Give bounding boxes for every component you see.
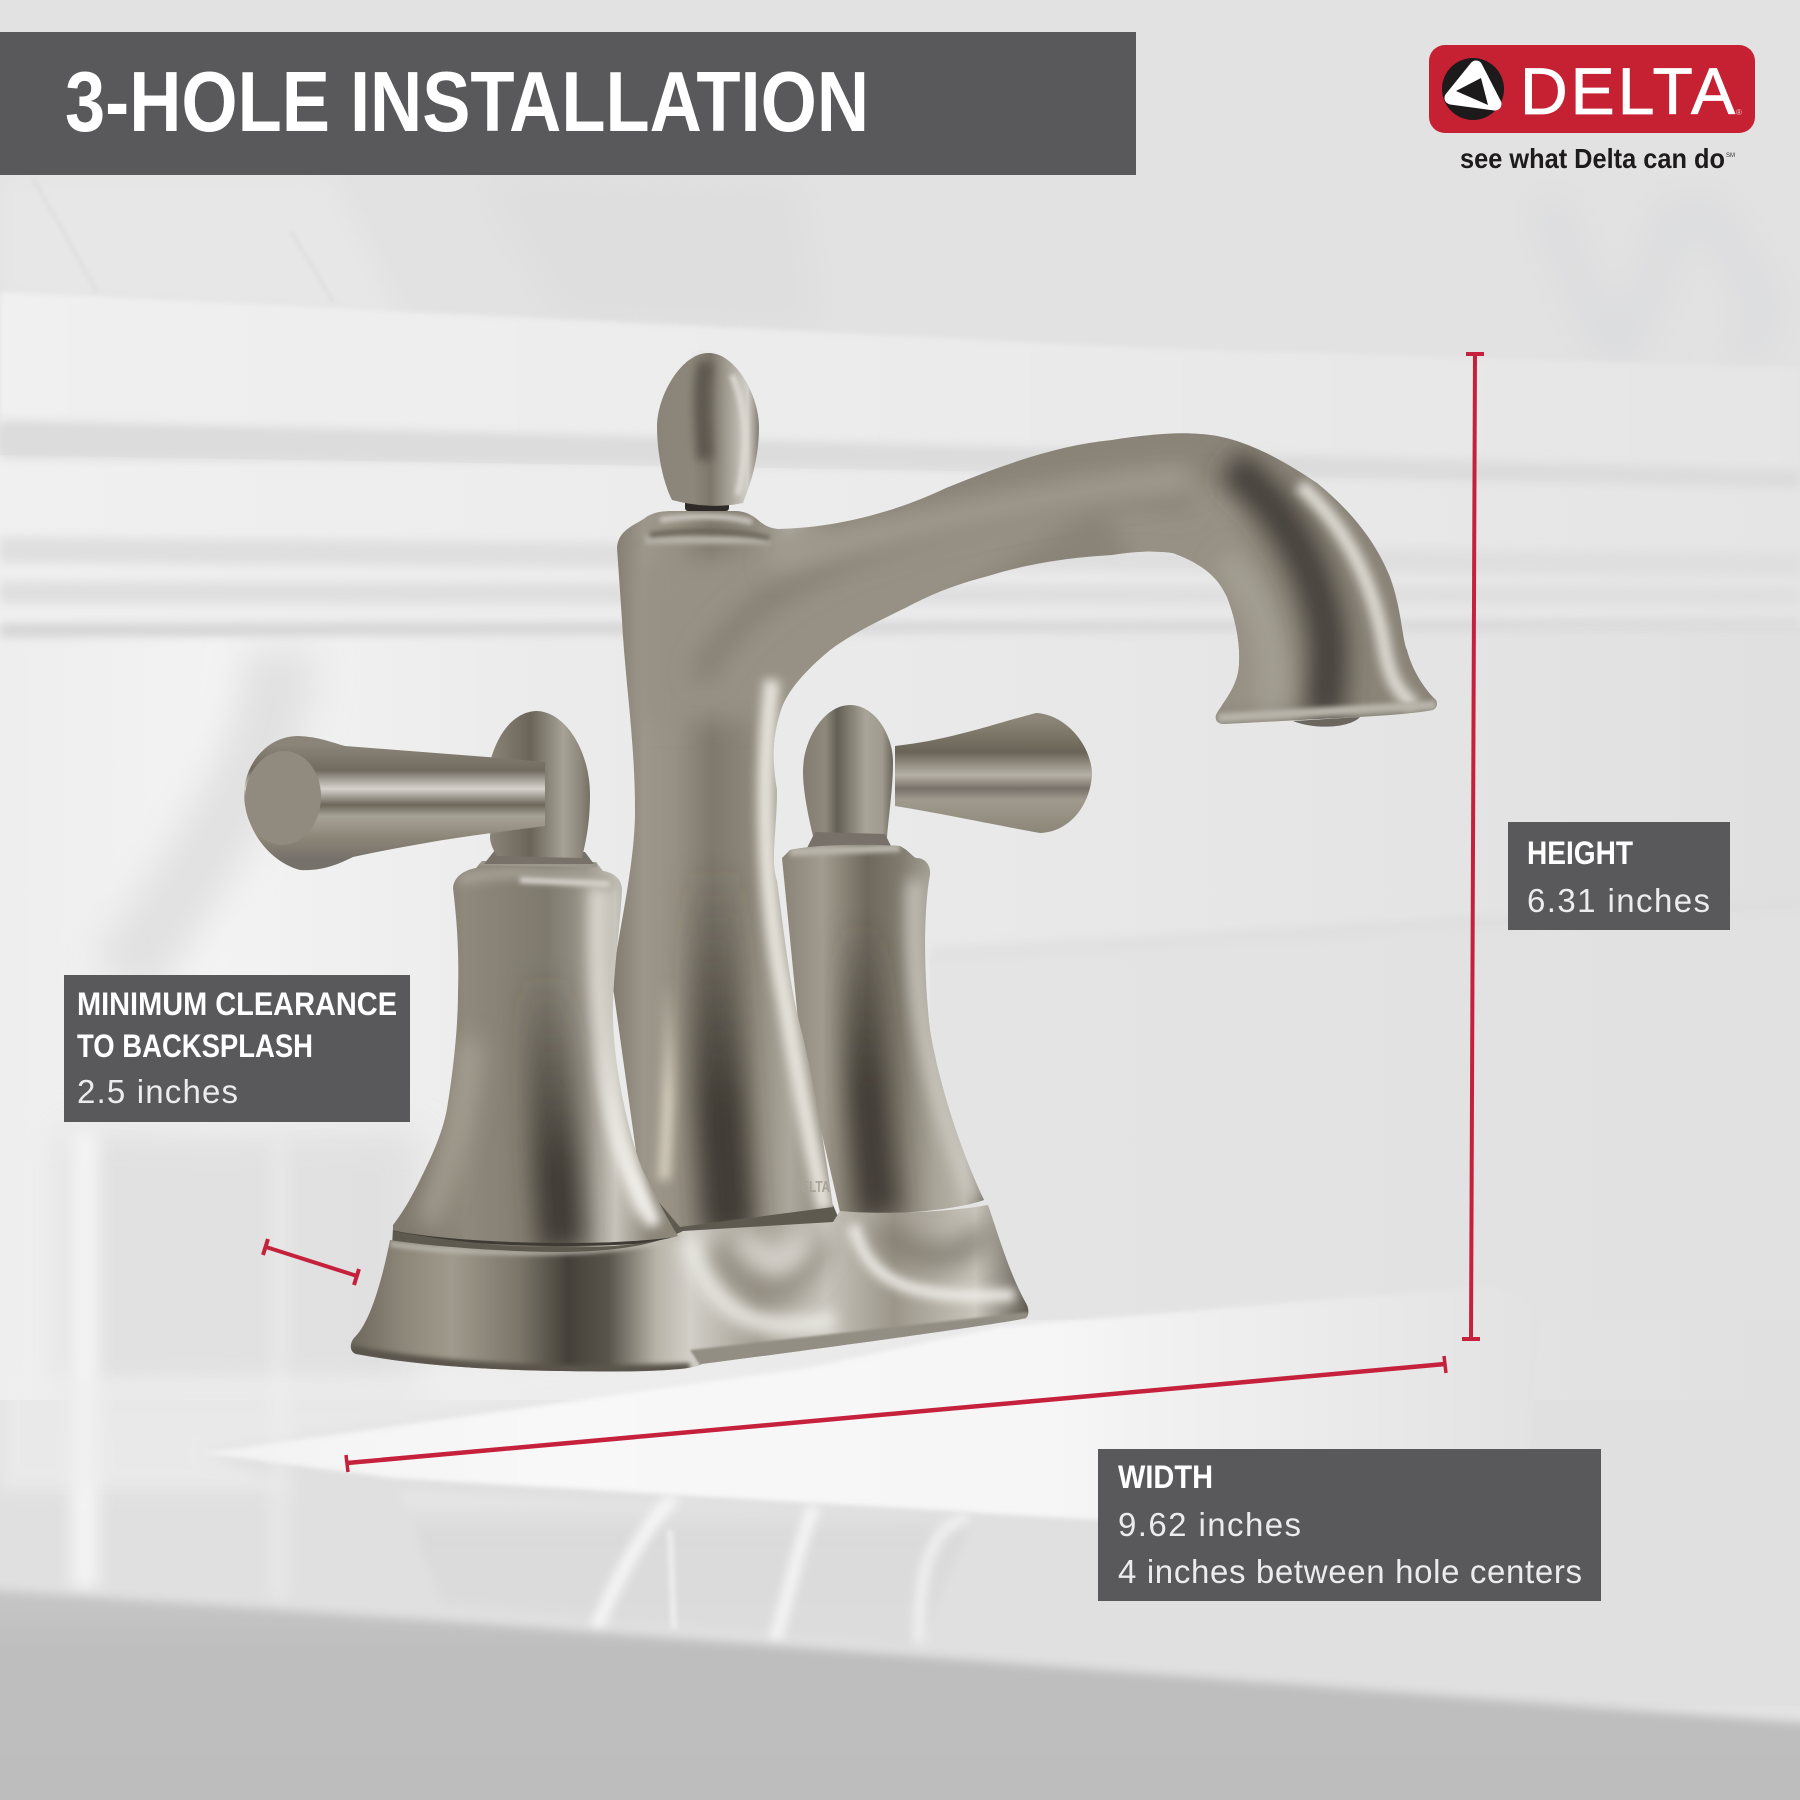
moulding grooves bbox=[0, 420, 1800, 637]
width heading: WIDTH bbox=[1118, 1459, 1213, 1495]
clearance heading: MINIMUM CLEARANCE bbox=[77, 986, 397, 1022]
left lever bbox=[244, 736, 545, 870]
aerator bbox=[1293, 717, 1360, 727]
registered mark: ® bbox=[1736, 108, 1742, 117]
lever end cap bbox=[242, 748, 324, 848]
finial gap bbox=[685, 500, 729, 511]
front floor bbox=[0, 1589, 1800, 1800]
base plate bbox=[350, 1205, 1028, 1372]
central column and spout bbox=[600, 420, 1460, 1250]
wall shadow sweep bbox=[120, 650, 280, 980]
left hub bbox=[490, 711, 590, 858]
tagline: see what Delta can do bbox=[1460, 143, 1725, 174]
right lever bbox=[895, 713, 1092, 833]
base seam backing bbox=[392, 1150, 842, 1260]
title: 3-HOLE INSTALLATION bbox=[65, 55, 869, 150]
width value: 9.62 inches bbox=[1118, 1506, 1301, 1543]
left handle bbox=[242, 711, 690, 1250]
dimension line: clearance bbox=[263, 1239, 359, 1285]
logo badge bbox=[1429, 45, 1755, 133]
counter back surface bbox=[0, 1368, 807, 1490]
right bell bbox=[782, 844, 984, 1213]
callout: minimum clearance bbox=[64, 975, 410, 1122]
service mark: SM bbox=[1726, 153, 1735, 159]
hole spacing: 4 inches between hole centers bbox=[1118, 1553, 1582, 1590]
left bell bbox=[390, 850, 690, 1250]
right collar bbox=[805, 832, 893, 852]
clearance value: 2.5 inches bbox=[77, 1073, 238, 1110]
faucet reflection in basin bbox=[400, 1492, 975, 1646]
height value: 6.31 inches bbox=[1527, 882, 1710, 919]
dimension line: width bbox=[346, 1356, 1446, 1472]
Delta logo bbox=[1429, 45, 1755, 174]
clearance heading line 2: TO BACKSPLASH bbox=[77, 1028, 313, 1064]
lower left shade bbox=[60, 1130, 420, 1420]
stamped brand mark: DELTA bbox=[793, 1179, 830, 1196]
left collar bbox=[484, 850, 594, 864]
height heading: HEIGHT bbox=[1527, 835, 1633, 871]
white vertical reflections bbox=[72, 1130, 286, 1600]
right handle bbox=[770, 705, 1092, 1220]
logo wordmark: DELTA bbox=[1520, 54, 1735, 128]
finial knob bbox=[657, 353, 759, 506]
counter top bbox=[203, 1286, 1612, 1560]
right wall step bbox=[930, 898, 1800, 962]
lower wall bbox=[0, 627, 1800, 1400]
moulding light bbox=[0, 455, 1800, 637]
marble tile wall bbox=[0, 0, 1800, 380]
faucet bbox=[242, 353, 1460, 1380]
logo icon bbox=[1442, 58, 1504, 120]
counter reflective face bbox=[0, 1376, 1800, 1706]
title banner bbox=[0, 32, 1136, 175]
right hub bbox=[803, 705, 893, 838]
dimension line: height bbox=[1462, 354, 1484, 1339]
callout: width bbox=[1098, 1449, 1601, 1601]
callout: height bbox=[1508, 822, 1730, 930]
ledge bbox=[0, 292, 1800, 475]
